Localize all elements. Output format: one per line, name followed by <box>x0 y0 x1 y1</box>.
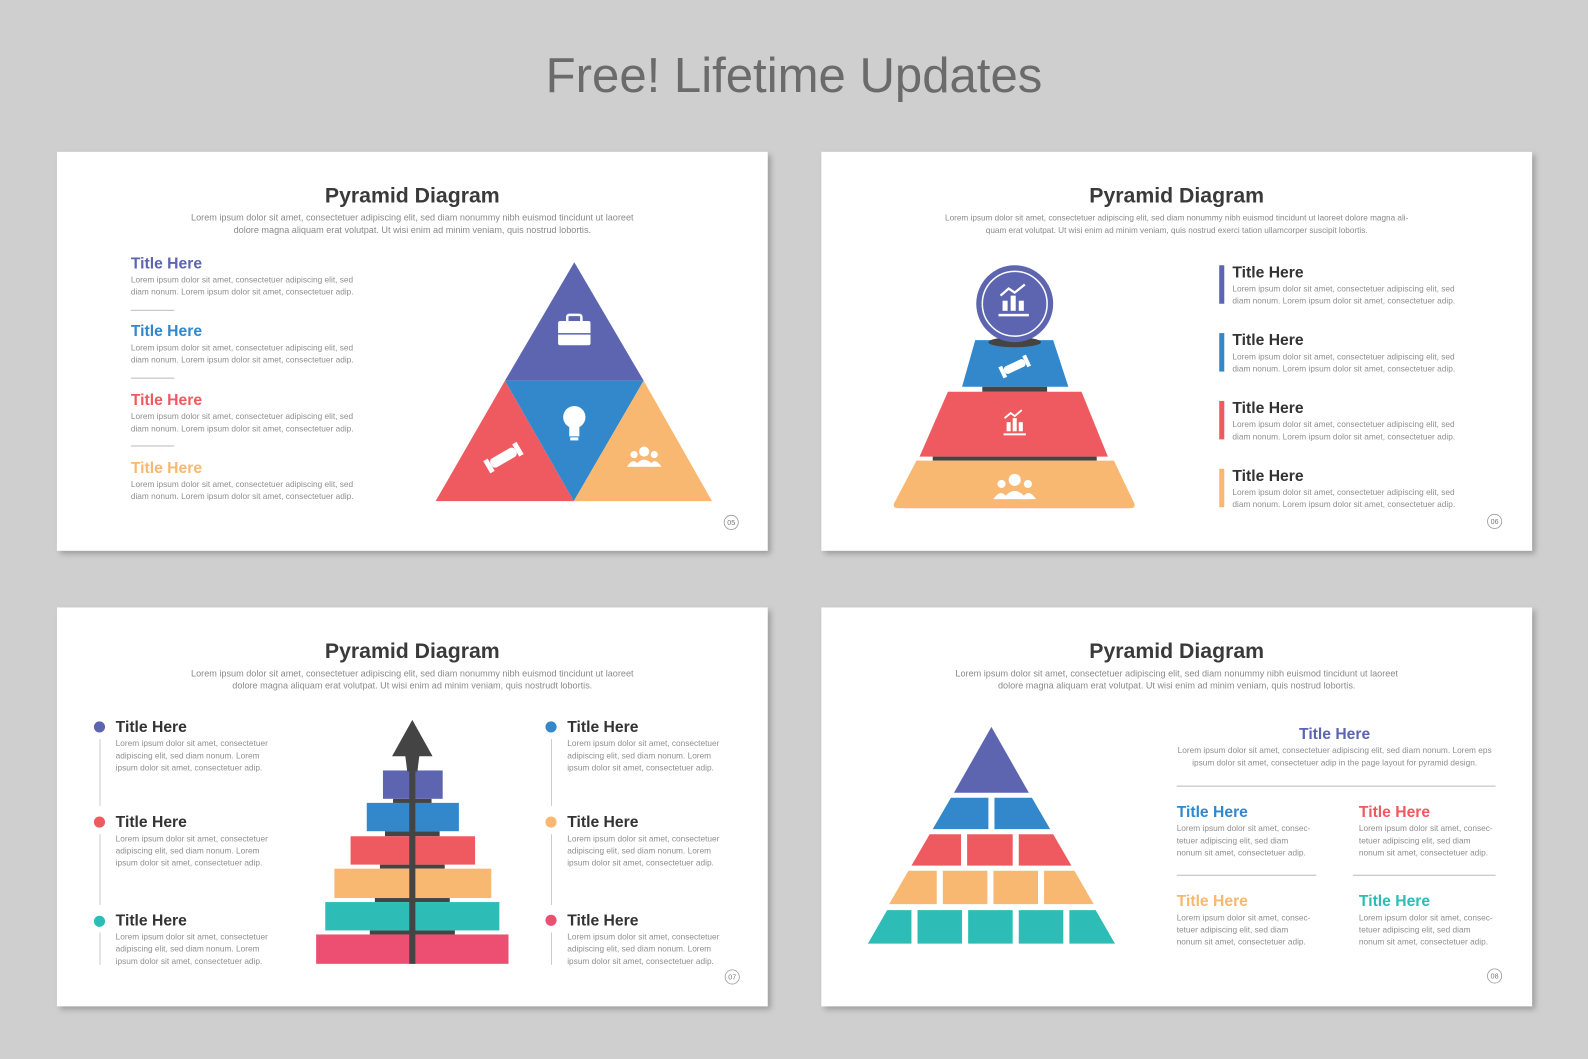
page number <box>1488 514 1502 528</box>
grid text blocks: Lorem ipsum dolor sit amet, consec- <box>1177 823 1311 833</box>
icon: chart <box>999 284 1029 316</box>
list items: Title Here <box>1232 332 1304 349</box>
right list: ipsum dolor sit amet, consectetuer adip. <box>567 858 714 868</box>
pyramid chart <box>894 265 1135 508</box>
grid text blocks: Title Here <box>1359 804 1430 821</box>
right list: adipiscing elit, sed diam nonum. Lorem <box>567 944 711 954</box>
subtitle: Lorem ipsum dolor sit amet, consectetuer adipiscing elit, sed diam nonummy nibh euismod tincidunt ut laoreet dolore magna ali- <box>945 214 1409 223</box>
arrow <box>392 720 433 964</box>
list items: diam nonum. Lorem ipsum dolor sit amet, consectetuer adip. <box>131 354 354 364</box>
page number: 06 <box>1491 518 1499 526</box>
page number <box>1488 969 1502 983</box>
list items: Lorem ipsum dolor sit amet, consectetuer adipiscing elit, sed <box>131 274 354 284</box>
list items: Lorem ipsum dolor sit amet, consectetuer adipiscing elit, sed <box>1232 487 1455 497</box>
subtitle: dolore magna aliquam erat volutpat. Ut wisi enim ad minim veniam, quis nostrud lobortis. <box>998 680 1355 690</box>
panel: arrow pyramid (07) <box>57 607 768 1006</box>
grid text blocks: nonum sit amet, consectetuer adip. <box>1177 937 1306 947</box>
list items: Lorem ipsum dolor sit amet, consectetuer adipiscing elit, sed <box>1232 351 1455 361</box>
heading: Pyramid Diagram <box>325 183 500 207</box>
top text block: Lorem ipsum dolor sit amet, consectetuer adipiscing elit, sed diam nonum. Lorem eps <box>1178 745 1492 755</box>
right list: Title Here <box>567 719 639 736</box>
left list: Title Here <box>116 814 187 831</box>
subtitle: quam erat volutpat. Ut wisi enim ad minim veniam, quis nostrud exerci tation ullamcorper suscipit lobortis. <box>986 226 1368 235</box>
subtitle: Lorem ipsum dolor sit amet, consectetuer adipiscing elit, sed diam nonummy nibh euismod tincidunt ut laoreet <box>191 213 634 223</box>
grid text blocks: Lorem ipsum dolor sit amet, consec- <box>1177 912 1311 922</box>
left list: Title Here <box>116 719 187 736</box>
grid text blocks <box>1177 804 1496 947</box>
page number: 08 <box>1491 973 1499 981</box>
panel: stacked pyramid (06) <box>821 152 1532 551</box>
page number: 05 <box>727 519 735 527</box>
right list <box>545 719 720 966</box>
list items: Title Here <box>131 392 202 409</box>
grid text blocks: nonum sit amet, consectetuer adip. <box>1177 848 1306 858</box>
page number <box>724 515 738 530</box>
list items: diam nonum. Lorem ipsum dolor sit amet, consectetuer adip. <box>1232 364 1455 374</box>
subtitle <box>191 213 634 235</box>
list items: Lorem ipsum dolor sit amet, consectetuer adipiscing elit, sed <box>131 479 354 489</box>
right list: Title Here <box>567 912 639 929</box>
subtitle: Lorem ipsum dolor sit amet, consectetuer adipiscing elit, sed diam nonummy nibh euismod tincidunt ut laoreet <box>955 668 1398 678</box>
list items: diam nonum. Lorem ipsum dolor sit amet, consectetuer adip. <box>1232 431 1455 441</box>
main title: Free! Lifetime Updates <box>546 49 1042 103</box>
icon: chart small <box>1004 410 1026 435</box>
list items: Lorem ipsum dolor sit amet, consectetuer adipiscing elit, sed <box>131 411 354 421</box>
grid text blocks: nonum sit amet, consectetuer adip. <box>1359 848 1488 858</box>
icon: bulb <box>563 406 585 440</box>
top text block: ipsum dolor sit amet, consectetuer adip in the page layout for pyramid design. <box>1192 757 1477 767</box>
list items: Title Here <box>131 460 202 477</box>
subtitle <box>191 668 634 690</box>
left list: Lorem ipsum dolor sit amet, consectetuer <box>116 932 268 942</box>
grid text blocks: nonum sit amet, consectetuer adip. <box>1359 937 1488 947</box>
list items: Title Here <box>131 323 202 340</box>
page number <box>725 970 739 984</box>
right list: Lorem ipsum dolor sit amet, consectetuer <box>567 833 720 843</box>
list items: Lorem ipsum dolor sit amet, consectetuer adipiscing elit, sed <box>1232 284 1455 294</box>
right list: Lorem ipsum dolor sit amet, consectetuer <box>567 738 720 748</box>
list items <box>131 255 354 501</box>
grid text blocks: tetuer adipiscing elit, sed diam <box>1359 924 1471 934</box>
grid text blocks: Title Here <box>1177 893 1248 910</box>
icon: people <box>993 474 1036 499</box>
list items: diam nonum. Lorem ipsum dolor sit amet, consectetuer adip. <box>131 287 354 297</box>
left list: ipsum dolor sit amet, consectetuer adip. <box>116 956 262 966</box>
grid text blocks: Title Here <box>1359 893 1430 910</box>
right list: ipsum dolor sit amet, consectetuer adip. <box>567 762 714 772</box>
subtitle <box>955 668 1398 690</box>
grid text blocks: tetuer adipiscing elit, sed diam <box>1177 924 1288 934</box>
left list: Lorem ipsum dolor sit amet, consectetuer <box>116 738 268 748</box>
panel: brick pyramid (08) <box>821 607 1532 1006</box>
heading: Pyramid Diagram <box>1089 183 1264 207</box>
list items: diam nonum. Lorem ipsum dolor sit amet, consectetuer adip. <box>131 491 354 501</box>
right list: ipsum dolor sit amet, consectetuer adip. <box>567 956 714 966</box>
list items: Title Here <box>1232 468 1304 485</box>
list items: Title Here <box>1232 400 1304 417</box>
brick pyramid chart <box>868 727 1115 945</box>
subtitle: dolore magna aliquam erat volutpat. Ut wisi enim ad minim veniam, quis nostrudt lobortis. <box>232 680 592 690</box>
list items: Title Here <box>1232 264 1304 281</box>
subtitle: Lorem ipsum dolor sit amet, consectetuer adipiscing elit, sed diam nonummy nibh euismod tincidunt ut laoreet <box>191 668 634 678</box>
heading: Pyramid Diagram <box>1089 639 1264 663</box>
left list: ipsum dolor sit amet, consectetuer adip. <box>116 858 262 868</box>
list items: Title Here <box>131 255 202 272</box>
left list: ipsum dolor sit amet, consectetuer adip. <box>116 762 262 772</box>
left list <box>94 719 268 966</box>
right list: Lorem ipsum dolor sit amet, consectetuer <box>567 932 720 942</box>
icon: briefcase <box>558 315 591 345</box>
list items <box>1219 264 1455 509</box>
left list: adipiscing elit, sed diam nonum. Lorem <box>116 944 260 954</box>
grid text blocks: Lorem ipsum dolor sit amet, consec- <box>1359 912 1493 922</box>
panel: triangle pyramid (05) <box>57 152 768 551</box>
right list: Title Here <box>567 814 639 831</box>
left list: adipiscing elit, sed diam nonum. Lorem <box>116 845 260 855</box>
icon: people <box>627 446 661 467</box>
arrow pyramid chart <box>316 720 508 964</box>
left list: adipiscing elit, sed diam nonum. Lorem <box>116 750 260 760</box>
list items: diam nonum. Lorem ipsum dolor sit amet, consectetuer adip. <box>131 423 354 433</box>
icon: handshake <box>998 355 1031 378</box>
right list: adipiscing elit, sed diam nonum. Lorem <box>567 750 711 760</box>
triangle chart <box>436 262 712 501</box>
right list: adipiscing elit, sed diam nonum. Lorem <box>567 845 711 855</box>
list items: Lorem ipsum dolor sit amet, consectetuer adipiscing elit, sed <box>131 342 354 352</box>
subtitle: dolore magna aliquam erat volutpat. Ut wisi enim ad minim veniam, quis nostrud lobortis. <box>234 225 591 235</box>
list items: diam nonum. Lorem ipsum dolor sit amet, consectetuer adip. <box>1232 499 1455 509</box>
grid text blocks: tetuer adipiscing elit, sed diam <box>1177 835 1288 845</box>
icon: handshake <box>483 442 524 473</box>
subtitle <box>945 214 1409 235</box>
left list: Title Here <box>116 912 187 929</box>
top text block: Title Here <box>1299 726 1371 743</box>
grid text blocks: tetuer adipiscing elit, sed diam <box>1359 835 1471 845</box>
list items: diam nonum. Lorem ipsum dolor sit amet, consectetuer adip. <box>1232 296 1455 306</box>
list items: Lorem ipsum dolor sit amet, consectetuer adipiscing elit, sed <box>1232 419 1455 429</box>
top text block <box>1178 726 1492 767</box>
left list: Lorem ipsum dolor sit amet, consectetuer <box>116 833 268 843</box>
grid text blocks: Title Here <box>1177 804 1248 821</box>
heading: Pyramid Diagram <box>325 639 500 663</box>
page number: 07 <box>728 974 736 982</box>
grid text blocks: Lorem ipsum dolor sit amet, consec- <box>1359 823 1493 833</box>
